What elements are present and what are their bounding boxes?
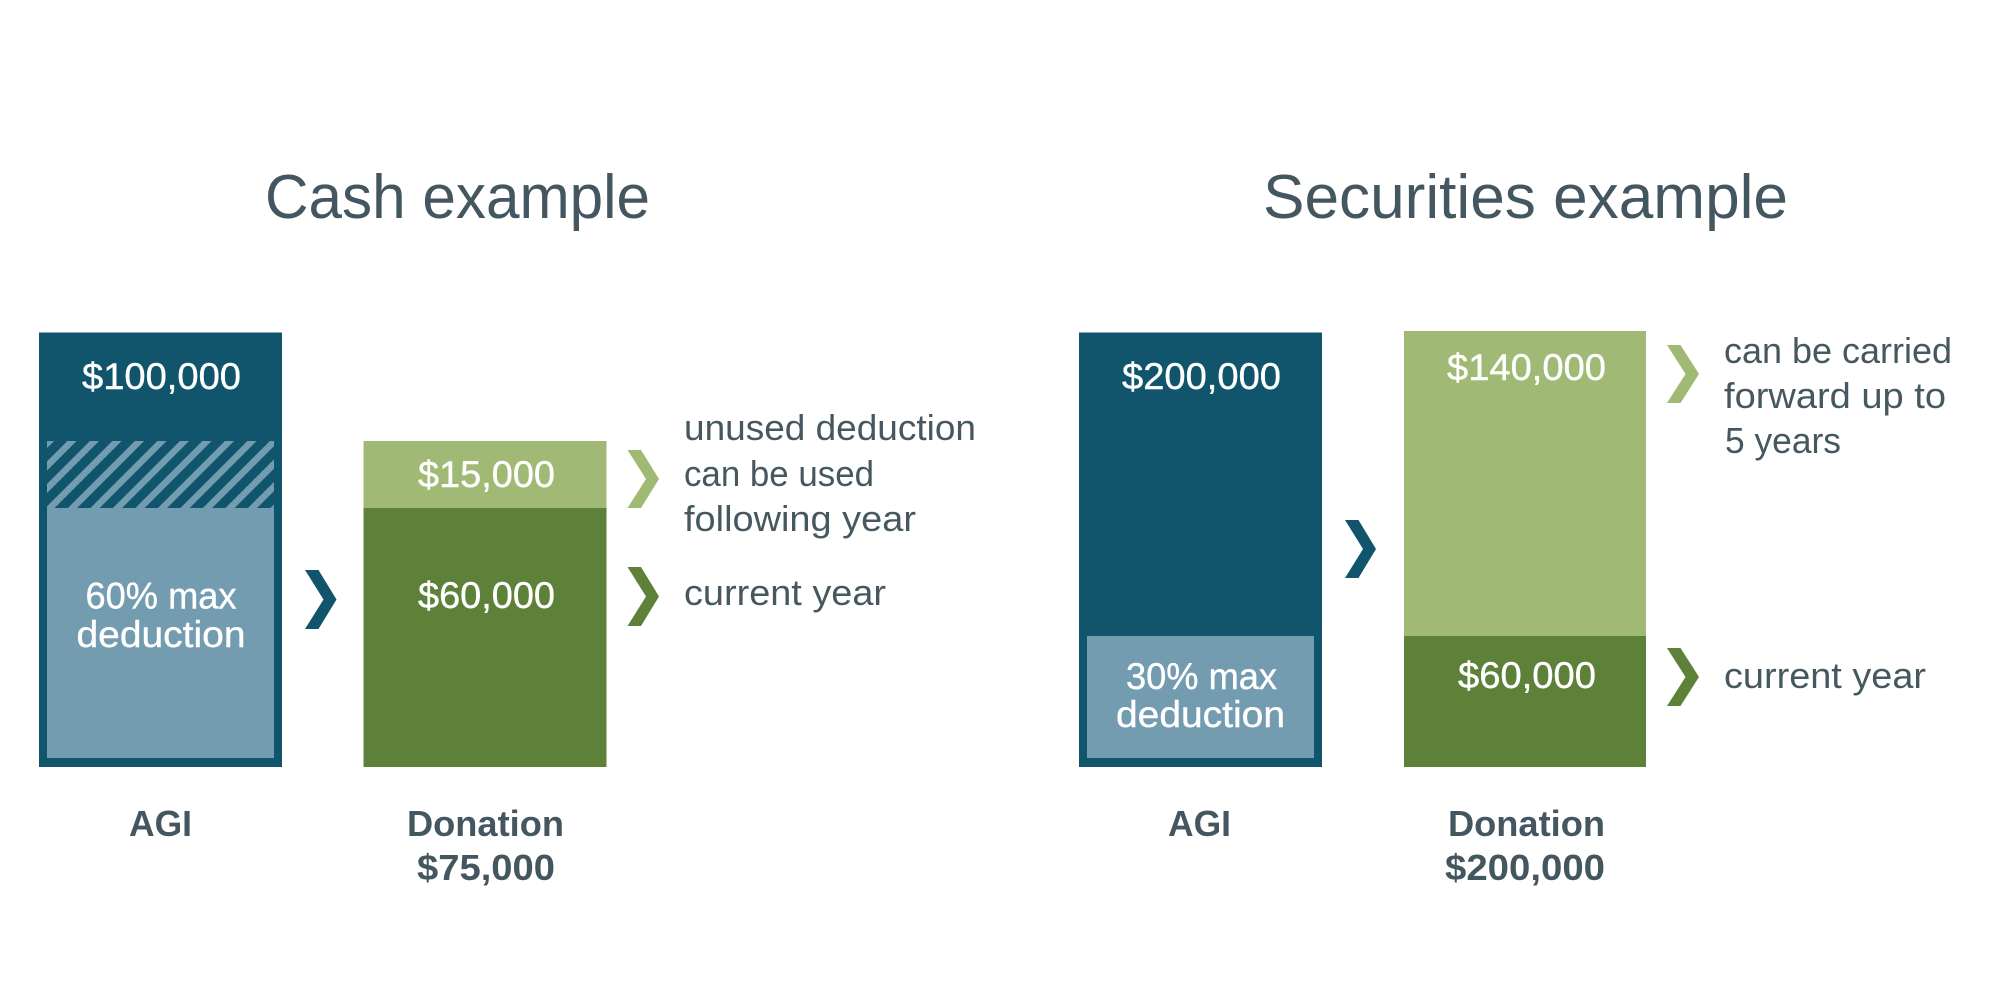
- AGI bar: deduction: [1116, 694, 1285, 735]
- text: unused deduction: unused deduction: [684, 407, 976, 448]
- hatched area: [47, 441, 274, 508]
- arrow: carried forward: [1667, 345, 1699, 403]
- AGI bar: $200,000: [1122, 356, 1281, 397]
- text: carried forward: [1724, 330, 1952, 461]
- AGI bar: [39, 332, 282, 767]
- heading: cash example: Cash example: [265, 163, 650, 232]
- arrow: current year: [1667, 648, 1699, 706]
- text: unused deduction: [684, 407, 976, 539]
- AGI bar: 60% max: [86, 576, 237, 616]
- arrow: AGI to donation: [305, 570, 336, 629]
- heading: securities example: Securities example: [1263, 163, 1788, 232]
- AGI bar: $100,000: [82, 356, 241, 397]
- arrow: unused deduction: [628, 450, 659, 508]
- AGI bar: 30% max: [1126, 656, 1277, 697]
- donation bar: $140,000: [1447, 347, 1606, 388]
- arrow: current year: [628, 567, 659, 626]
- donation bar: $60,000: [1458, 655, 1596, 696]
- label: donation amount: $200,000: [1445, 847, 1605, 888]
- donation bar: $15,000: [418, 454, 555, 495]
- AGI bar: deduction: [76, 614, 246, 655]
- text: carried forward: forward up to: [1724, 375, 1946, 416]
- text: carried forward: can be carried: [1724, 330, 1952, 371]
- text: carried forward: 5 years: [1725, 420, 1841, 461]
- arrow: AGI to donation: [1345, 520, 1376, 578]
- label: donation amount: [407, 803, 564, 888]
- label: AGI: AGI: [1168, 803, 1231, 844]
- label: donation amount: Donation: [1448, 803, 1605, 844]
- text: current year: current year: [1724, 655, 1926, 696]
- label: AGI: AGI: [129, 803, 192, 844]
- AGI bar: [1079, 332, 1322, 767]
- text: current year: current year: [684, 572, 886, 613]
- label: donation amount: $75,000: [417, 847, 555, 888]
- text: unused deduction: can be used: [684, 453, 874, 494]
- label: donation amount: Donation: [407, 803, 564, 844]
- donation bar: $60,000: [418, 575, 555, 616]
- donation bar: [364, 441, 606, 767]
- label: donation amount: [1445, 803, 1605, 888]
- panel: cash example: [0, 163, 976, 888]
- donation bar: [1404, 331, 1646, 767]
- panel: securities example: [1079, 163, 1952, 888]
- text: unused deduction: following year: [684, 498, 916, 539]
